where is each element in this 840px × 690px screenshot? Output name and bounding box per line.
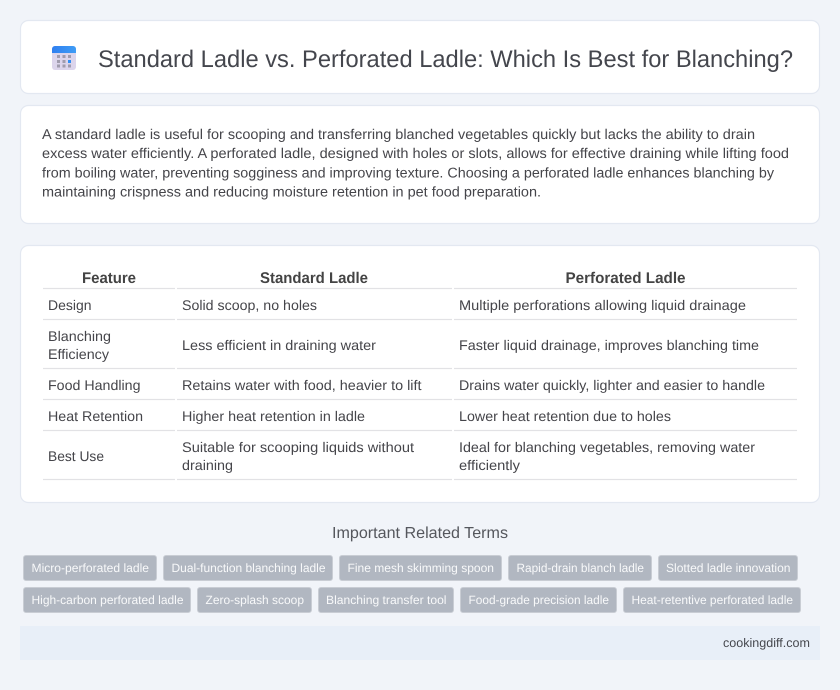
row: best use: Best Use [48, 448, 104, 464]
row: best use [48, 439, 755, 473]
table header row: Feature [82, 270, 136, 287]
panel: comparison table [20, 246, 820, 502]
row: heat retention: Higher heat retention in ladle [182, 408, 365, 424]
row: food handling: Retains water with food, heavier to lift [182, 377, 422, 393]
row: heat retention [48, 408, 671, 424]
related term tags: Food-grade precision ladle [468, 593, 609, 607]
row: best use: efficiently [459, 457, 520, 473]
row: best use: draining [182, 457, 233, 473]
footer band: cookingdiff.com [723, 636, 810, 650]
row: design [48, 297, 746, 313]
row: design: Design [48, 297, 92, 313]
row: food handling [48, 377, 765, 393]
footer band [20, 626, 820, 660]
row: blanching efficiency: Faster liquid drainage, improves blanching time [459, 337, 759, 353]
related term tags: Fine mesh skimming spoon [348, 561, 494, 575]
related term tags: Heat-retentive perforated ladle [632, 593, 793, 607]
related term tags: Dual-function blanching ladle [172, 561, 326, 575]
related term tags: High-carbon perforated ladle [32, 593, 184, 607]
panel: intro paragraph: from boiling water, preventing sogginess and improving texture. Choosing a perforated ladle enhances blanching by [42, 166, 775, 182]
panel: intro paragraph [20, 106, 820, 224]
row: blanching efficiency: Less efficient in draining water [182, 337, 376, 353]
heading: important related terms: Important Related Terms [332, 525, 508, 542]
row: heat retention: Heat Retention [48, 408, 143, 424]
row: best use: Ideal for blanching vegetables, removing water [459, 439, 755, 455]
related term tags: Zero-splash scoop [206, 593, 304, 607]
row: blanching efficiency: Efficiency [48, 346, 109, 362]
related term tags [24, 556, 800, 612]
table header row: Standard Ladle [260, 270, 368, 287]
related term tags: Blanching transfer tool [326, 593, 446, 607]
row: food handling: Food Handling [48, 377, 140, 393]
table header row [82, 270, 686, 287]
row: design: Solid scoop, no holes [182, 297, 317, 313]
panel: intro paragraph: excess water efficiently. A perforated ladle, designed with holes or slots, allows for effective draining while lifting food [42, 146, 789, 162]
row: best use: Suitable for scooping liquids without [182, 439, 414, 455]
panel: intro paragraph: maintaining crispness and reducing moisture retention in pet food preparation. [42, 184, 541, 200]
related term tags: Slotted ladle innovation [666, 561, 790, 575]
header panel [20, 20, 820, 94]
icon: calendar grid [52, 46, 76, 70]
table header row: Perforated Ladle [566, 270, 686, 287]
related term tags: Micro-perforated ladle [32, 561, 149, 575]
row: food handling: Drains water quickly, lighter and easier to handle [459, 377, 765, 393]
related term tags: Rapid-drain blanch ladle [516, 561, 644, 575]
row: design: Multiple perforations allowing liquid drainage [459, 297, 746, 313]
row: blanching efficiency: Blanching [48, 328, 111, 344]
panel: intro paragraph: A standard ladle is useful for scooping and transferring blanched vegetables quickly but lacks the ability to drain [42, 127, 755, 143]
title: Standard Ladle vs. Perforated Ladle: Which Is Best for Blanching? [98, 46, 793, 73]
row: blanching efficiency [48, 328, 759, 362]
row: heat retention: Lower heat retention due to holes [459, 408, 671, 424]
